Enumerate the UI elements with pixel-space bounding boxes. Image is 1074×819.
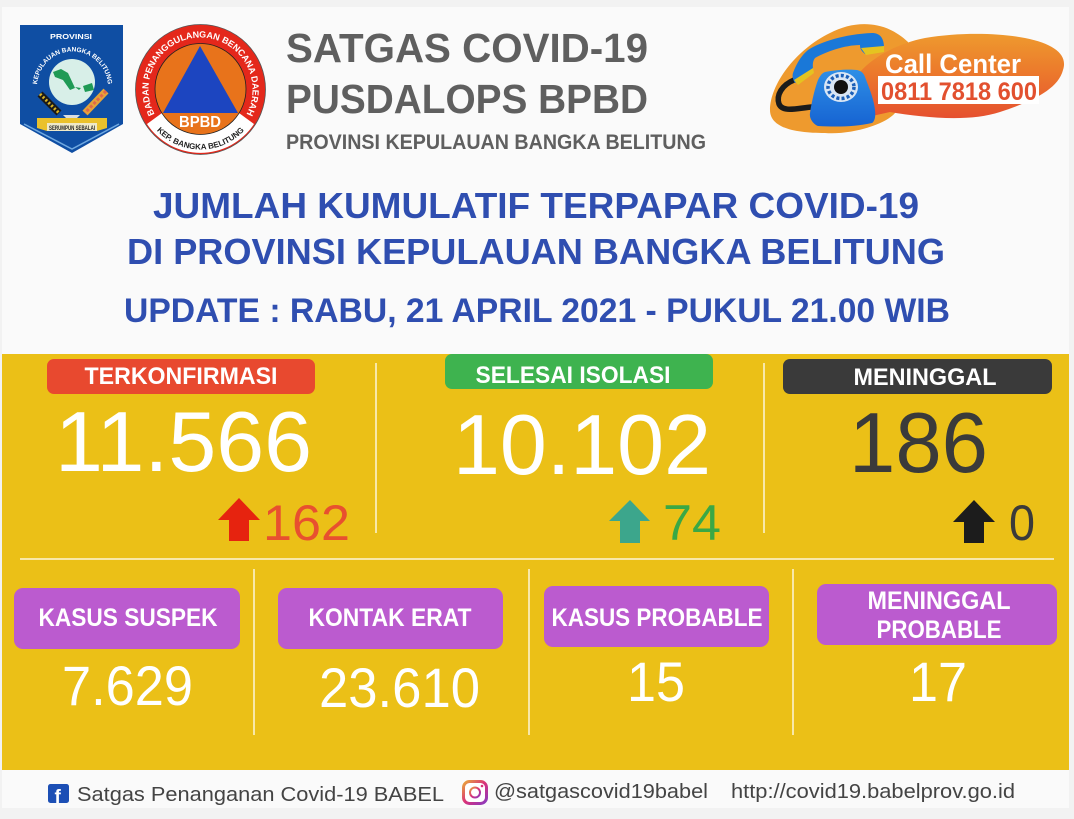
stat: kasus probable: 15 — [627, 650, 685, 713]
stat: terkonfirmasi: TERKONFIRMASI — [84, 363, 278, 390]
icon: instagram — [464, 782, 486, 804]
icon: provincial shield logo: SERUMPUN SEBALAI — [49, 126, 95, 132]
icon: provincial shield logo: KEPULAUAN BANGKA BELITUNG — [32, 46, 112, 84]
icon: BPBD logo: KEP. BANGKA BELITUNG — [157, 126, 244, 150]
call center badge — [770, 24, 1064, 133]
footer: Satgas Penanganan Covid-19 BABEL — [77, 784, 444, 806]
icon: teal up arrow — [609, 500, 650, 543]
icon: facebook — [48, 784, 69, 808]
phone cord — [778, 80, 812, 109]
stat: meninggal — [783, 359, 1052, 551]
icon: BPBD logo: BPBD — [179, 114, 221, 131]
stat: kasus suspek — [14, 588, 240, 717]
stat: meninggal probable: PROBABLE — [876, 616, 1002, 644]
icon: provincial shield logo: PROVINSI — [50, 34, 92, 41]
main title: JUMLAH KUMULATIF TERPAPAR COVID-19 — [153, 185, 919, 226]
heading: organisation: PROVINSI KEPULAUAN BANGKA BELITUNG — [286, 131, 706, 154]
phone handset — [793, 33, 884, 83]
icon: provincial shield logo — [20, 25, 123, 153]
call center label: Call Center — [885, 49, 1021, 79]
stat: kontak erat: 23.610 — [319, 656, 480, 719]
stat: meninggal: 186 — [849, 396, 988, 491]
heading: organisation: SATGAS COVID-19 — [286, 25, 648, 71]
stat: selesai isolasi: 74 — [663, 495, 721, 551]
footer — [48, 781, 1015, 808]
call center badge: 0811 7818 600 — [881, 78, 1037, 106]
stat: kasus probable: KASUS PROBABLE — [552, 604, 762, 632]
stat: kasus probable — [544, 586, 769, 713]
stat: terkonfirmasi: 162 — [263, 495, 350, 551]
main title: DI PROVINSI KEPULAUAN BANGKA BELITUNG — [127, 231, 945, 272]
stat: terkonfirmasi — [47, 359, 350, 551]
main title — [124, 185, 950, 330]
icon: BPBD logo: BADAN PENANGGULANGAN BENCANA DAERAH — [142, 31, 259, 116]
icon: red up arrow — [218, 498, 260, 541]
stat: kasus suspek: 7.629 — [62, 654, 193, 717]
stat: selesai isolasi: 10.102 — [453, 398, 711, 493]
stat: meninggal: MENINGGAL — [854, 364, 996, 391]
icon: black up arrow — [953, 500, 995, 543]
stat: selesai isolasi: SELESAI ISOLASI — [476, 362, 670, 389]
phone body — [810, 70, 875, 127]
stat: meninggal probable: 17 — [909, 650, 967, 713]
heading: organisation — [286, 25, 706, 154]
footer: @satgascovid19babel — [494, 781, 708, 803]
stat: kontak erat — [278, 588, 503, 719]
stat: meninggal probable — [817, 584, 1057, 713]
stat: selesai isolasi — [445, 354, 721, 551]
icon: facebook: f — [54, 787, 62, 808]
update date: UPDATE : RABU, 21 APRIL 2021 - PUKUL 21.00 WIB — [124, 292, 950, 330]
stat: terkonfirmasi: 11.566 — [55, 395, 312, 490]
stat: meninggal: 0 — [1009, 495, 1035, 551]
heading: organisation: PUSDALOPS BPBD — [286, 76, 648, 122]
footer: http://covid19.babelprov.go.id — [731, 781, 1015, 803]
stat: meninggal probable: MENINGGAL — [868, 587, 1010, 615]
stat: kasus suspek: KASUS SUSPEK — [38, 604, 218, 632]
data panel — [2, 354, 1069, 770]
icon: BPBD logo — [135, 24, 266, 155]
stat: kontak erat: KONTAK ERAT — [308, 604, 472, 632]
